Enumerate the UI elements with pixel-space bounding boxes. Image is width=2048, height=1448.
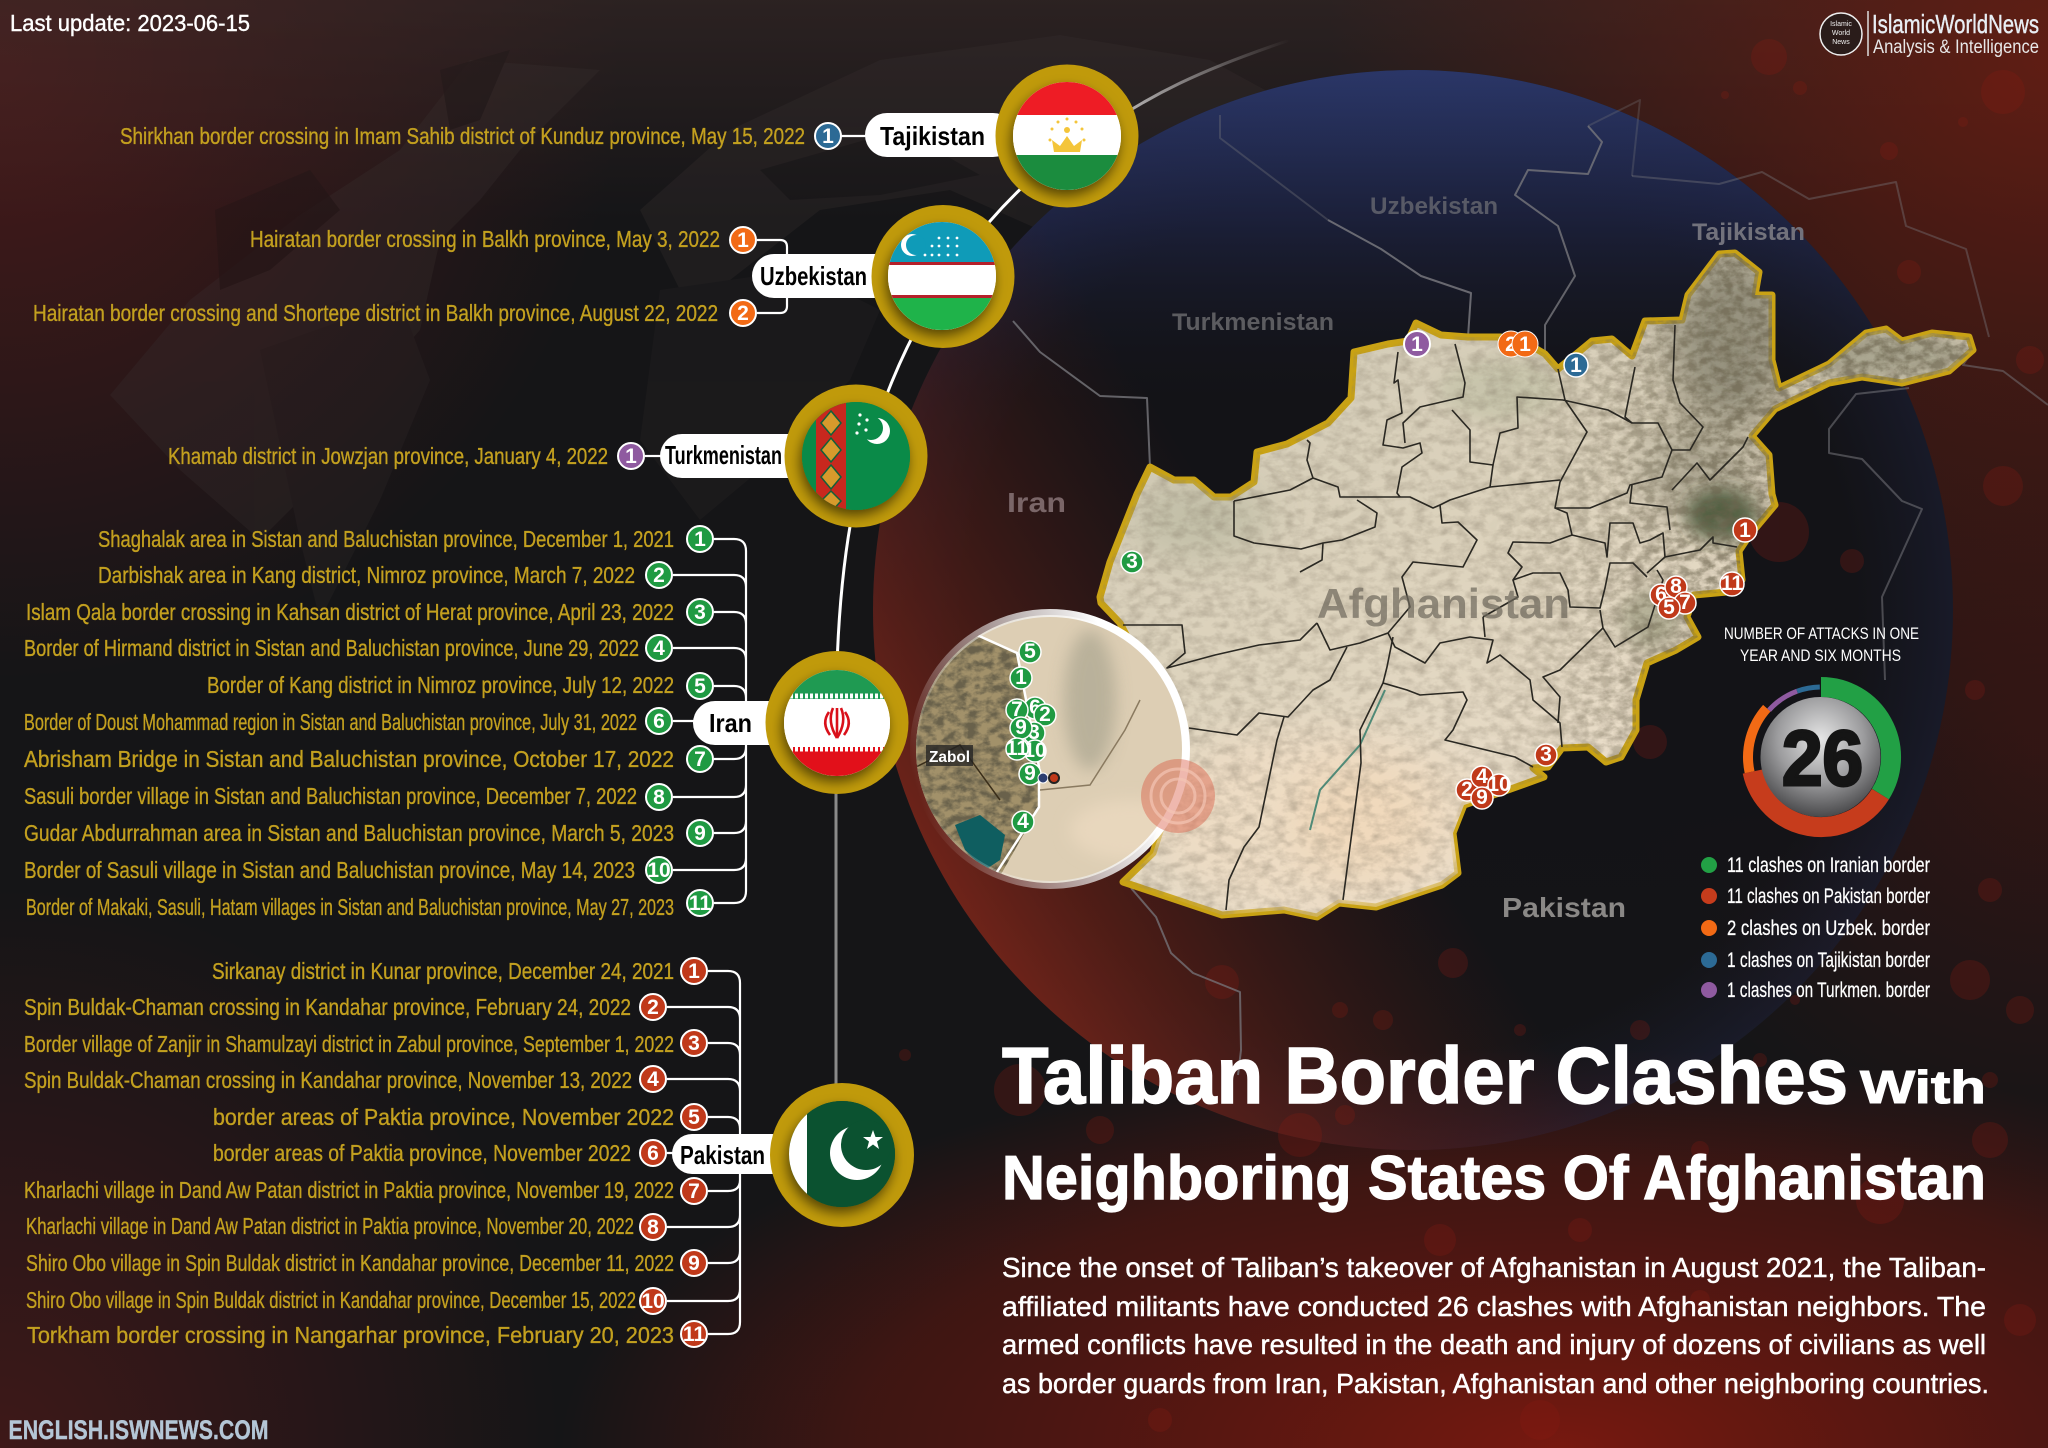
Pakistan incident list: Border village of Zanjir in Shamulzayi district in Zabul province, September 1, 2022	[24, 1031, 674, 1057]
Iran incident list: Border of Sasuli village in Sistan and Baluchistan province, May 14, 2023	[24, 857, 635, 883]
last update stamp: Last update: 2023-06-15	[10, 10, 250, 36]
Pakistan incident list: border areas of Paktia province, November 2022	[213, 1104, 674, 1130]
Iran incident list: 9	[694, 822, 706, 845]
Pakistan incident list: border areas of Paktia province, November 2022	[213, 1140, 631, 1166]
Iran incident list: 1	[694, 528, 706, 551]
map markers	[1121, 331, 1757, 809]
marker: Iran 3	[1121, 550, 1143, 573]
marker: Tajik 1: 1	[1570, 354, 1582, 377]
Pakistan incident list: Shiro Obo village in Spin Buldak district in Kandahar province, December 11, 2022	[26, 1250, 674, 1276]
markers: Pakistan border: 9	[1476, 786, 1488, 809]
legend: 11 clashes on Pakistan border	[1727, 885, 1930, 908]
label: Tajikistan: Tajikistan	[1692, 219, 1805, 246]
Pakistan incident list: 2	[647, 996, 659, 1019]
markers: Pakistan border: 10	[1487, 773, 1511, 796]
marker: Tajik 1	[1564, 353, 1588, 377]
country node: Tajikistan	[120, 64, 1138, 208]
description paragraph: Since the onset of Taliban’s takeover of Afghanistan in August 2021, the Taliban-	[1002, 1252, 1986, 1283]
donut chart: 26	[1782, 714, 1863, 802]
logo	[1820, 9, 2039, 58]
Pakistan incident list: 10	[641, 1290, 665, 1313]
connector bracket	[673, 539, 746, 903]
flag: Uzbekistan	[872, 205, 1014, 348]
description paragraph: armed conflicts have resulted in the death and injury of dozens of civilians as well	[1002, 1329, 1986, 1360]
location pulse marker	[1141, 759, 1215, 833]
label: Iran: Iran	[1007, 487, 1066, 518]
Iran incident list: Gudar Abdurrahman area in Sistan and Baluchistan province, March 5, 2023	[24, 820, 674, 846]
title: With	[1860, 1061, 1986, 1113]
marker: Uzbek 2 and 1: 1	[1519, 333, 1531, 356]
neighbouring borders	[1013, 100, 2048, 1075]
Iran incident list: 6	[653, 710, 665, 733]
Iran incident list: 3	[694, 601, 706, 624]
marker: Uzbek 2 and 1: 2	[1505, 333, 1517, 356]
pill label: Turkmenistan	[665, 440, 782, 470]
panel heading: NUMBER OF ATTACKS IN ONE	[1724, 624, 1919, 643]
Iran incident list: Abrisham Bridge in Sistan and Baluchistan province, October 17, 2022	[24, 746, 674, 772]
Iran incident list: 11	[689, 892, 711, 915]
Pakistan incident list: 7	[688, 1180, 700, 1203]
flag: Pakistan	[770, 1083, 914, 1227]
Pakistan incident list: 3	[688, 1032, 700, 1055]
markers: Pakistan border: 6	[1655, 583, 1667, 606]
website footer: ENGLISH.ISWNEWS.COM	[8, 1415, 268, 1445]
pill label	[660, 434, 810, 478]
markers: Pakistan border: 3	[1540, 743, 1552, 766]
description paragraph: as border guards from Iran, Pakistan, Afghanistan and other neighboring countries.	[1002, 1368, 1989, 1399]
pill label: Iran	[709, 708, 752, 738]
item: Shirkhan: 1	[822, 125, 834, 148]
marker: Turkmen 1	[1404, 331, 1430, 357]
legend: 1 clashes on Turkmen. border	[1727, 979, 1930, 1002]
Iran incident list: Border of Kang district in Nimroz province, July 12, 2022	[207, 672, 674, 698]
marker: Uzbek 2 and 1	[1498, 331, 1538, 357]
markers: Pakistan border: 8	[1670, 575, 1682, 598]
markers: Pakistan border: 1	[1739, 519, 1751, 542]
legend: 1 clashes on Tajikistan border	[1727, 949, 1930, 972]
markers: Pakistan border: 2	[1461, 778, 1473, 801]
Pakistan incident list: 5	[688, 1106, 700, 1129]
inset map of Sistan border	[910, 600, 1190, 885]
Pakistan incident list	[24, 958, 707, 1348]
inset markers: 5	[1024, 640, 1036, 663]
Pakistan incident list: Torkham border crossing in Nangarhar province, February 20, 2023	[27, 1322, 674, 1348]
red splatter decoration	[899, 25, 2044, 1440]
Pakistan incident list: 9	[688, 1252, 700, 1275]
title	[1002, 1031, 1986, 1213]
Pakistan incident list: Spin Buldak-Chaman crossing in Kandahar province, November 13, 2022	[24, 1067, 632, 1093]
pill label: Uzbekistan	[760, 261, 867, 291]
item: Khamab: Khamab district in Jowzjan province, January 4, 2022	[168, 443, 608, 469]
markers: Pakistan border: 7	[1679, 591, 1691, 614]
Pakistan incident list: Sirkanay district in Kunar province, December 24, 2021	[212, 958, 674, 984]
Pakistan incident list: 1	[688, 960, 700, 983]
item: Hairatan 2: 2	[737, 302, 749, 325]
inset label: Zabol: Zabol	[929, 749, 970, 766]
Iran incident list: 10	[647, 859, 671, 882]
markers: Pakistan border: 11	[1721, 572, 1743, 595]
pill label	[865, 113, 1015, 157]
inset markers: 11	[1006, 737, 1028, 760]
pill label: Pakistan	[680, 1140, 765, 1170]
pill label	[693, 701, 803, 745]
large background circle	[873, 70, 1953, 1150]
logo: World	[1832, 30, 1850, 37]
Pakistan incident list: Kharlachi village in Dand Aw Patan district in Paktia province, November 20, 2022	[26, 1213, 634, 1239]
timeline connector line	[836, 40, 1290, 1100]
description paragraph: affiliated militants have conducted 26 clashes with Afghanistan neighbors. The	[1002, 1291, 1986, 1322]
inset markers: 3	[1028, 721, 1040, 744]
neighbour country labels	[1007, 193, 1805, 923]
Iran incident list: Shaghalak area in Sistan and Baluchistan province, December 1, 2021	[98, 526, 674, 552]
label: Turkmenistan: Turkmenistan	[1172, 309, 1334, 336]
inset markers: 2	[1039, 703, 1051, 726]
Iran incident list	[24, 526, 713, 920]
item: Khamab: 1	[625, 445, 637, 468]
title: Neighboring States Of Afghanistan	[1002, 1144, 1986, 1213]
panel heading	[1724, 624, 1919, 665]
Iran incident list: 8	[653, 786, 665, 809]
Iran incident list: 7	[694, 748, 706, 771]
inset markers: 7	[1011, 698, 1023, 721]
pill label: Tajikistan	[880, 121, 985, 151]
flag: Tajikistan	[996, 64, 1138, 208]
inset markers: 9	[1024, 762, 1036, 785]
logo: News	[1832, 39, 1850, 46]
item: Hairatan 1: Hairatan border crossing in Balkh province, May 3, 2022	[250, 226, 720, 252]
legend	[1701, 854, 1930, 1002]
Iran incident list: 5	[694, 675, 706, 698]
inset markers: 10	[1023, 739, 1047, 762]
panel heading: YEAR AND SIX MONTHS	[1740, 646, 1901, 665]
inset markers	[1006, 640, 1059, 833]
inset markers: 6	[1029, 696, 1041, 719]
country node: Pakistan	[24, 958, 914, 1348]
attack count panel	[1701, 624, 1930, 1002]
flag: Turkmenistan	[784, 384, 928, 528]
title: Taliban Border Clashes	[1002, 1031, 1848, 1120]
label: Afghanistan: Afghanistan	[1317, 580, 1570, 627]
pill label	[752, 254, 902, 298]
inset markers: 9	[1015, 716, 1027, 739]
background world map	[110, 35, 1320, 620]
Iran incident list: Border of Hirmand district in Sistan and Baluchistan province, June 29, 2022	[24, 635, 639, 661]
inset markers: 1	[1015, 666, 1027, 689]
marker: Turkmen 1: 1	[1411, 333, 1423, 356]
label: Pakistan: Pakistan	[1502, 892, 1626, 923]
item: Hairatan 1: 1	[737, 229, 749, 252]
item: Shirkhan: Shirkhan border crossing in Imam Sahib district of Kunduz province, May 15, 2022	[120, 123, 805, 149]
Pakistan incident list: 6	[647, 1142, 659, 1165]
description paragraph	[1002, 1252, 1989, 1399]
province boundaries	[1123, 325, 1748, 910]
item: Hairatan 2: Hairatan border crossing and Shortepe district in Balkh province, August 22, 2022	[33, 300, 718, 326]
legend: 11 clashes on Iranian border	[1727, 854, 1930, 877]
Pakistan incident list: 8	[647, 1216, 659, 1239]
map of Afghanistan	[1090, 240, 1990, 930]
Pakistan incident list: 11	[683, 1323, 705, 1346]
country node: Uzbekistan	[33, 205, 1014, 348]
Pakistan incident list: Kharlachi village in Dand Aw Patan district in Paktia province, November 19, 2022	[24, 1177, 674, 1203]
Iran incident list: 2	[653, 564, 665, 587]
Pakistan incident list: Spin Buldak-Chaman crossing in Kandahar province, February 24, 2022	[24, 994, 631, 1020]
Iran incident list: Sasuli border village in Sistan and Baluchistan province, December 7, 2022	[24, 783, 637, 809]
Iran incident list: Border of Makaki, Sasuli, Hatam villages in Sistan and Baluchistan province, May 27, 2023	[26, 894, 674, 920]
markers: Pakistan border	[1456, 518, 1757, 809]
connector bracket	[757, 240, 787, 313]
legend: 2 clashes on Uzbek. border	[1727, 917, 1930, 940]
Iran incident list: Islam Qala border crossing in Kahsan district of Herat province, April 23, 2022	[26, 599, 674, 625]
marker: Iran 3: 3	[1126, 550, 1138, 573]
inset markers: 4	[1017, 810, 1029, 833]
connector bracket	[667, 971, 740, 1334]
Iran incident list: 4	[653, 637, 665, 660]
Iran incident list: Border of Doust Mohammad region in Sistan and Baluchistan province, July 31, 2022	[24, 709, 637, 735]
logo: Islamic	[1830, 21, 1852, 28]
pill label	[672, 1134, 792, 1174]
Pakistan incident list: Shiro Obo village in Spin Buldak district in Kandahar province, December 15, 2022	[26, 1287, 636, 1313]
Iran incident list: Darbishak area in Kang district, Nimroz province, March 7, 2022	[98, 562, 635, 588]
Pakistan incident list: 4	[647, 1068, 659, 1091]
country node: Turkmenistan	[168, 384, 928, 528]
markers: Pakistan border: 4	[1476, 765, 1488, 788]
flag: Iran	[766, 651, 908, 794]
markers: Pakistan border: 5	[1663, 596, 1675, 619]
country node: Iran	[24, 526, 908, 920]
label: Uzbekistan: Uzbekistan	[1370, 193, 1498, 220]
donut chart	[1748, 687, 1891, 827]
